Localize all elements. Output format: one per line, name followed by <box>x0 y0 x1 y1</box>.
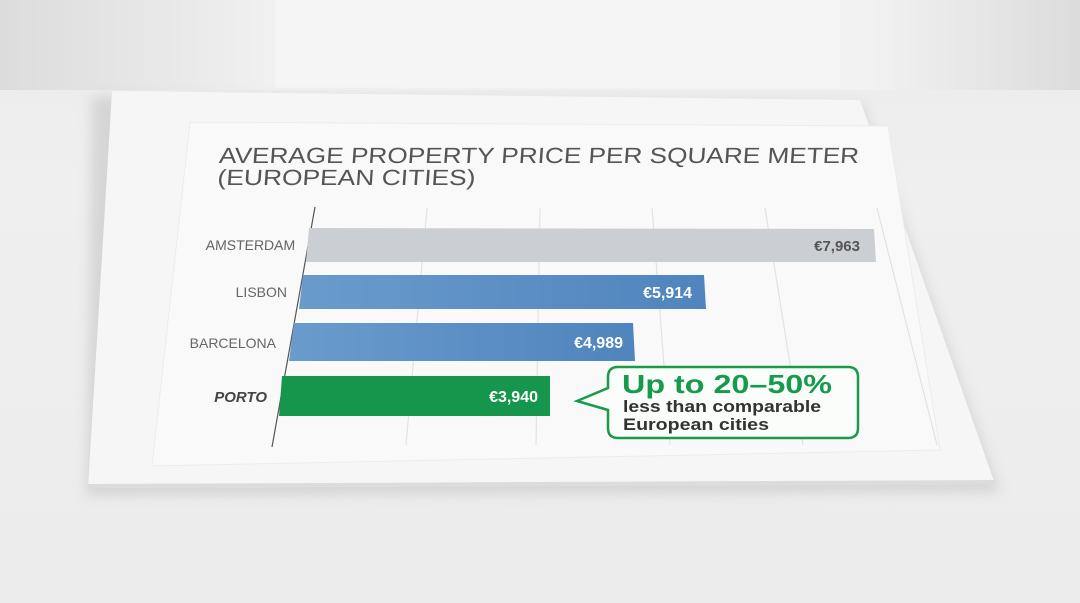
title: AVERAGE PROPERTY PRICE PER SQUARE METER <box>218 143 860 168</box>
bar: Amsterdam: AMSTERDAM <box>205 237 296 253</box>
bar: Porto <box>214 376 550 416</box>
bar: Amsterdam <box>205 228 876 262</box>
bar: Barcelona: €4,989 <box>574 335 623 352</box>
callout: Up to 20–50% <box>622 369 832 399</box>
paper sheets <box>86 91 1000 496</box>
title <box>217 143 860 190</box>
callout <box>577 367 858 438</box>
bar: Barcelona <box>190 323 635 361</box>
bar: Amsterdam: €7,963 <box>814 238 860 255</box>
bar: Lisbon: €5,914 <box>643 285 692 302</box>
bar: Porto: €3,940 <box>489 389 538 406</box>
bar: Barcelona: BARCELONA <box>190 335 277 351</box>
axis <box>272 207 315 447</box>
bar: Lisbon <box>236 275 706 309</box>
callout: European cities <box>623 415 769 434</box>
gridlines <box>406 208 937 445</box>
callout: less than comparable <box>623 397 821 416</box>
bar: Lisbon: LISBON <box>236 284 287 300</box>
title: (EUROPEAN CITIES) <box>217 165 476 190</box>
bar: Porto: PORTO <box>214 389 267 406</box>
